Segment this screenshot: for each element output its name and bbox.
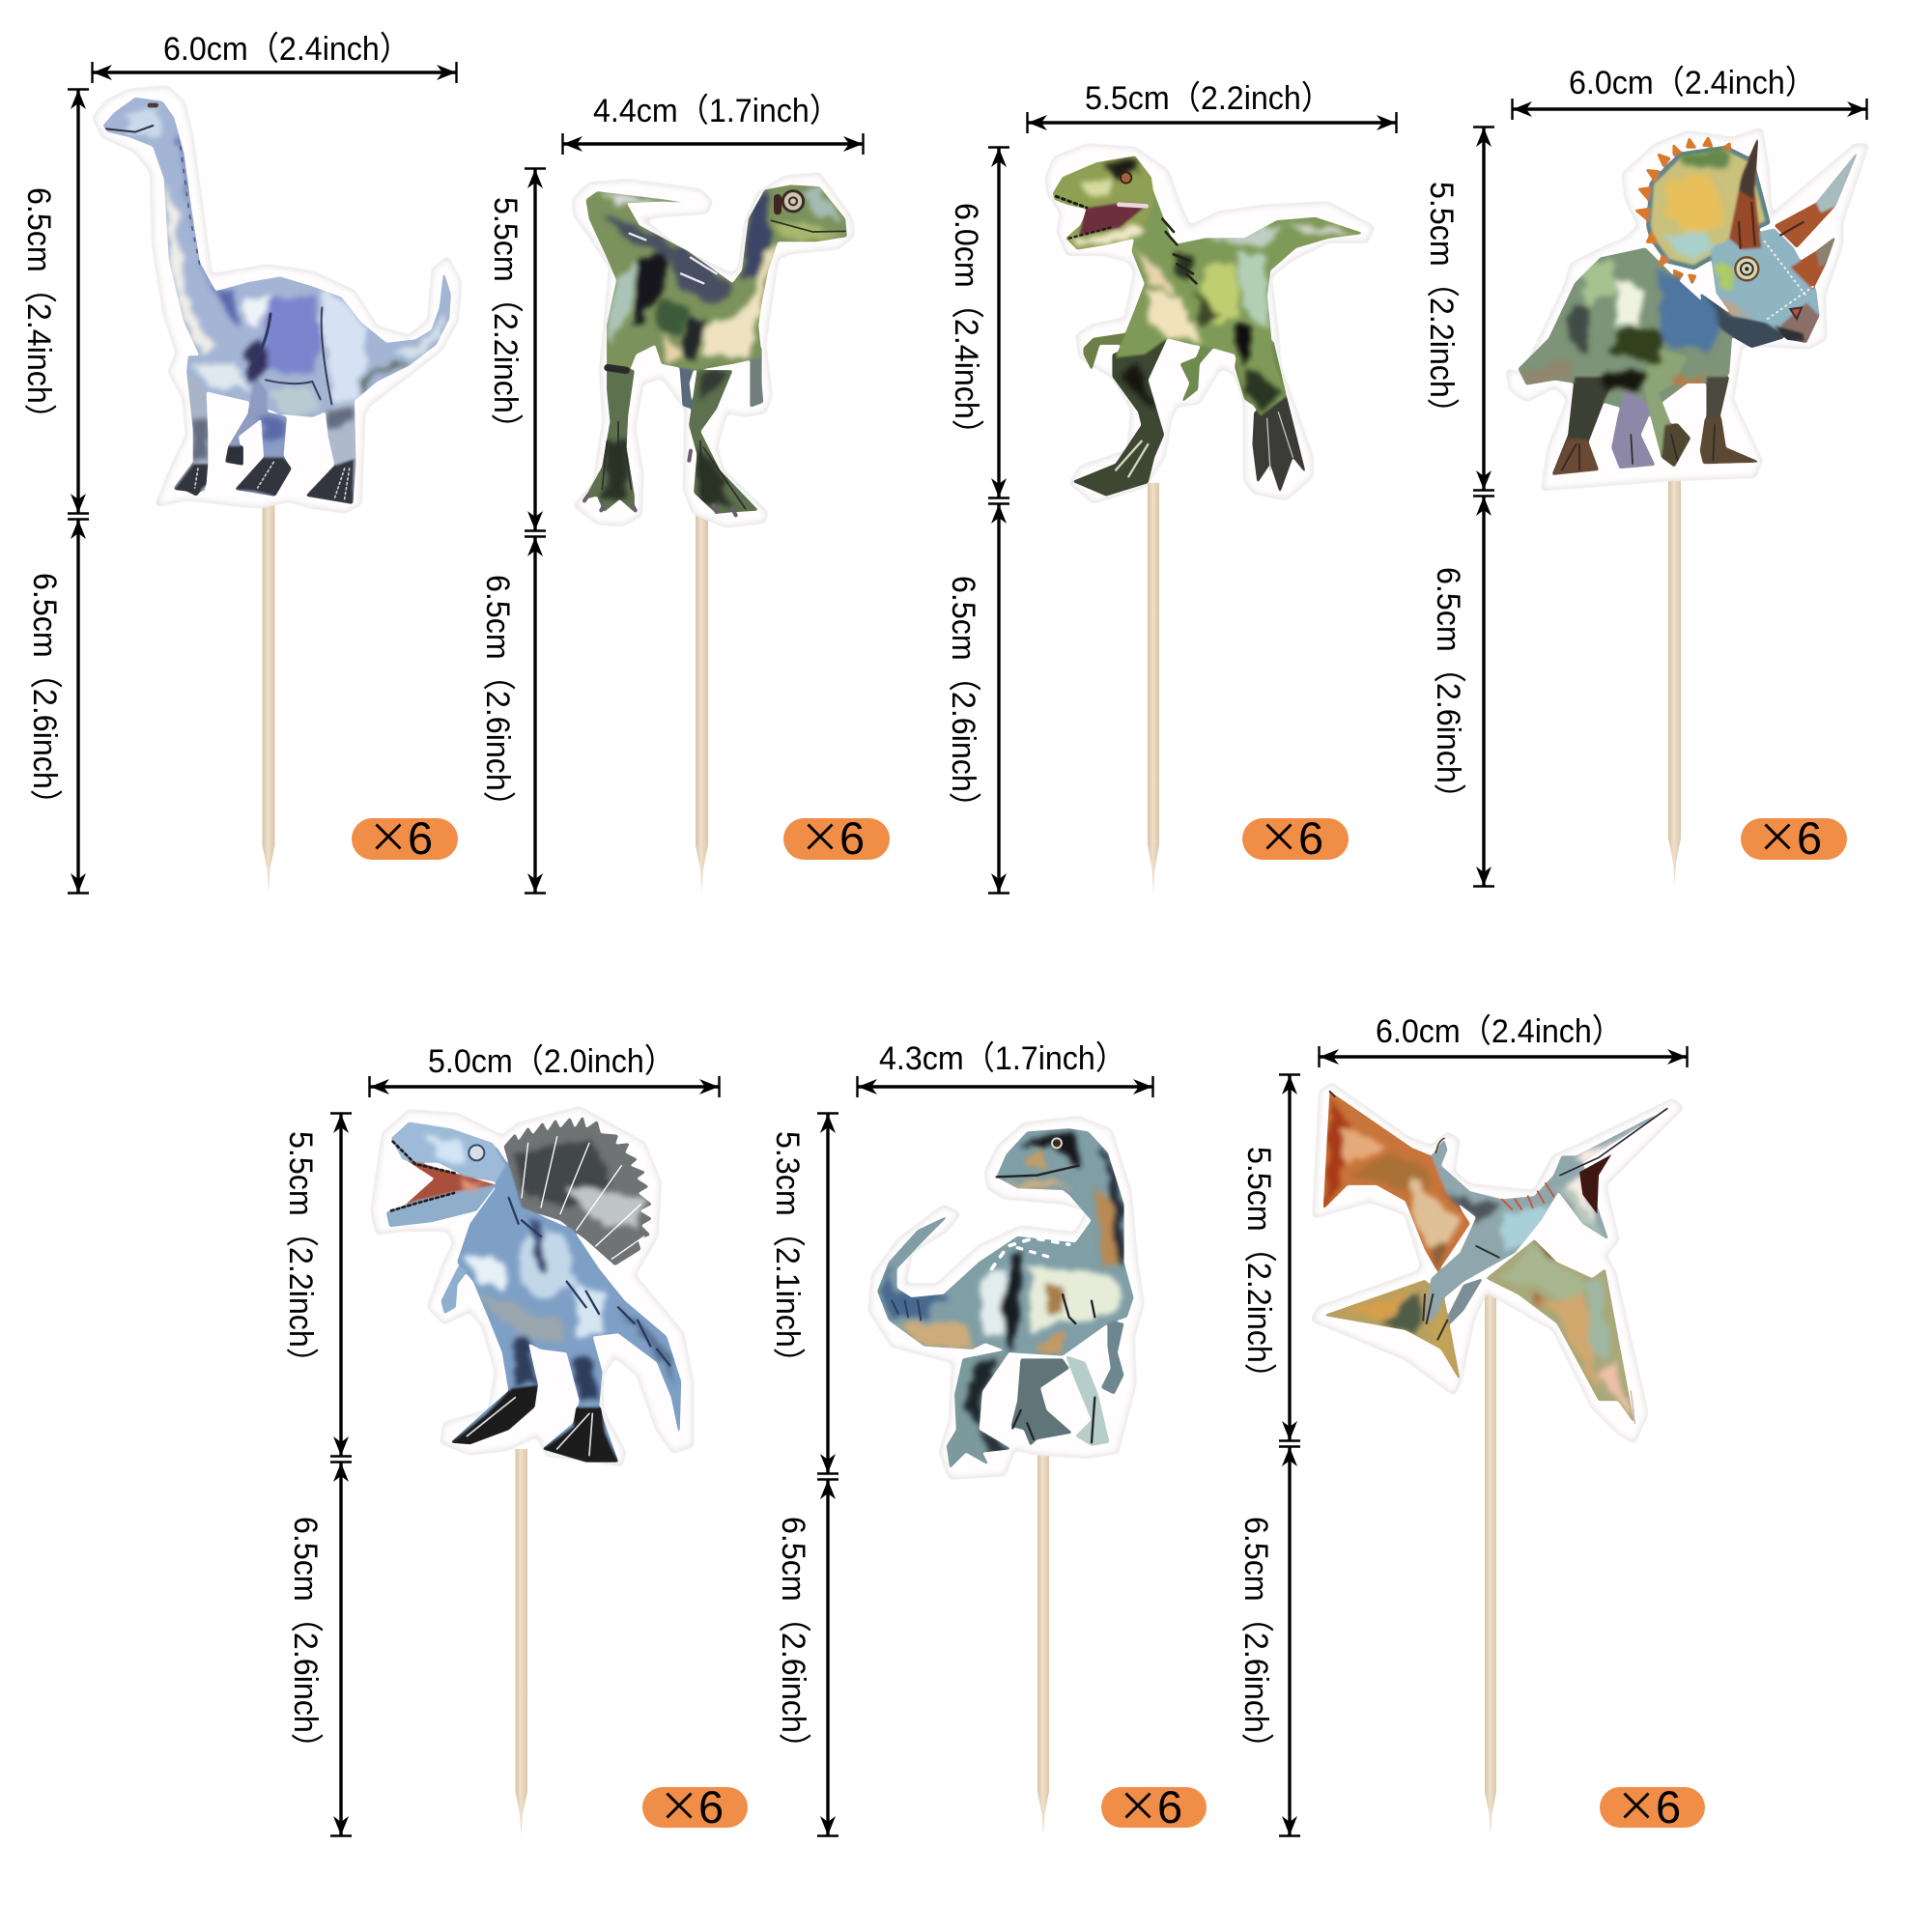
- width dimension arrow: [858, 1085, 1152, 1089]
- upper height arrow: [339, 1114, 343, 1456]
- lower height arrow: [1288, 1447, 1292, 1835]
- ink detail lines: [892, 1138, 1094, 1442]
- watercolor shading: [601, 186, 847, 505]
- triceratops figure: [1519, 136, 1858, 475]
- quantity badge: ×: [659, 1775, 699, 1833]
- upper height arrow: [533, 169, 537, 530]
- pterosaur illustration: [1312, 1084, 1683, 1442]
- ink detail lines: [1330, 1092, 1667, 1423]
- lower height arrow: [997, 504, 1001, 893]
- quantity badge: 6: [839, 812, 865, 864]
- upper height arrow: [1482, 128, 1486, 490]
- width label: 5.5cm（2.2inch）: [1085, 80, 1332, 117]
- quantity badge: [1242, 806, 1349, 865]
- upper height arrow: [826, 1114, 830, 1473]
- width label: 4.3cm（1.7inch）: [879, 1040, 1126, 1077]
- quantity badge: ×: [1259, 806, 1299, 865]
- width label: 6.0cm（2.4inch）: [1569, 65, 1816, 101]
- upper height label: 6.5cm（2.4inch）: [20, 187, 57, 435]
- sauropod illustration: [94, 87, 461, 512]
- upper height label: 5.5cm（2.2inch）: [282, 1131, 319, 1378]
- width label: 6.0cm（2.4inch）: [1376, 1013, 1623, 1050]
- quantity badge: ×: [1757, 806, 1798, 865]
- raptor illustration: [573, 174, 853, 526]
- lower height label: 6.5cm（2.6inch）: [479, 575, 516, 822]
- raptor figure: [877, 1128, 1133, 1468]
- width label: 5.0cm（2.0inch）: [428, 1043, 675, 1080]
- width label: 6.0cm（2.4inch）: [163, 31, 411, 68]
- ink detail lines: [106, 105, 350, 499]
- lower height arrow: [339, 1463, 343, 1835]
- lower height arrow: [533, 537, 537, 893]
- toothpick: [1485, 1256, 1496, 1835]
- upper height label: 5.5cm（2.2inch）: [1423, 182, 1460, 429]
- quantity badge: [352, 806, 458, 865]
- ink detail lines: [1056, 172, 1293, 476]
- quantity badge: ×: [1616, 1775, 1657, 1833]
- quantity badge: [1741, 806, 1847, 865]
- raptor figure: [584, 185, 847, 514]
- upper height label: 5.5cm（2.2inch）: [487, 197, 524, 444]
- spinosaurus figure: [386, 1116, 681, 1462]
- lower height label: 6.5cm（2.6inch）: [1430, 567, 1466, 814]
- raptor illustration: [869, 1118, 1143, 1478]
- lower height label: 6.5cm（2.6inch）: [1237, 1517, 1274, 1764]
- ink detail lines: [391, 1137, 669, 1456]
- upper height arrow: [1288, 1075, 1292, 1440]
- quantity badge: ×: [1118, 1775, 1158, 1833]
- ink detail lines: [1562, 203, 1813, 470]
- lower height arrow: [1482, 497, 1486, 886]
- upper height label: 5.5cm（2.2inch）: [1240, 1147, 1277, 1394]
- watercolor shading: [1070, 159, 1360, 409]
- quantity badge: 6: [1298, 812, 1323, 864]
- upper height label: 6.0cm（2.4inch）: [948, 203, 984, 450]
- die-cut card: [1507, 128, 1867, 490]
- upper height arrow: [76, 90, 80, 513]
- width dimension arrow: [93, 71, 456, 74]
- quantity badge: 6: [408, 812, 433, 864]
- watercolor shading: [879, 1133, 1123, 1456]
- lower height label: 6.5cm（2.6inch）: [775, 1517, 811, 1764]
- panel: pterosaur topper: [1237, 1013, 1705, 1835]
- pterosaur figure: [1323, 1092, 1666, 1423]
- toothpick: [1668, 473, 1681, 886]
- quantity badge: 6: [1797, 812, 1822, 864]
- watercolor shading: [1325, 1098, 1647, 1423]
- upper height label: 5.3cm（2.1inch）: [769, 1131, 806, 1378]
- t-rex illustration: [1046, 145, 1374, 502]
- width dimension arrow: [1320, 1055, 1687, 1059]
- sauropod figure: [103, 98, 451, 504]
- toothpick: [1148, 483, 1159, 893]
- quantity badge: [1101, 1775, 1207, 1833]
- quantity badge: ×: [368, 806, 409, 865]
- panel: green raptor topper: [479, 93, 890, 893]
- watercolor shading: [126, 108, 444, 462]
- lower height label: 6.5cm（2.6inch）: [287, 1517, 324, 1764]
- die-cut card: [869, 1118, 1143, 1478]
- die-cut card: [372, 1108, 693, 1465]
- quantity badge: 6: [1656, 1781, 1681, 1833]
- lower height label: 6.5cm（2.6inch）: [945, 576, 981, 823]
- triceratops illustration: [1507, 128, 1867, 490]
- die-cut card: [1312, 1084, 1683, 1442]
- die-cut card: [94, 87, 461, 512]
- toothpick: [263, 483, 274, 893]
- quantity badge: 6: [698, 1781, 724, 1833]
- ink detail lines: [584, 191, 845, 515]
- quantity badge: 6: [1157, 1781, 1182, 1833]
- width dimension arrow: [370, 1085, 719, 1089]
- die-cut card: [573, 174, 853, 526]
- spinosaurus illustration: [372, 1108, 693, 1465]
- panel: triceratops topper: [1423, 65, 1867, 886]
- quantity badge: [1600, 1775, 1705, 1833]
- width label: 4.4cm（1.7inch）: [593, 93, 840, 129]
- panel: spinosaurus topper: [282, 1043, 748, 1835]
- width dimension arrow: [563, 142, 863, 146]
- die-cut card: [1046, 145, 1374, 502]
- quantity badge: ×: [800, 806, 840, 865]
- quantity badge: [642, 1775, 748, 1833]
- width dimension arrow: [1513, 107, 1866, 111]
- lower height arrow: [826, 1480, 830, 1835]
- upper height arrow: [997, 148, 1001, 497]
- lower height arrow: [76, 520, 80, 893]
- panel: long-neck sauropod topper: [20, 31, 461, 893]
- toothpick: [516, 1449, 527, 1835]
- lower height label: 6.5cm（2.6inch）: [26, 573, 63, 820]
- panel: blue-green raptor topper: [769, 1040, 1207, 1835]
- watercolor shading: [1523, 152, 1755, 393]
- toothpick: [1037, 1449, 1049, 1835]
- t-rex figure: [1053, 156, 1364, 496]
- panel: green t-rex topper: [945, 80, 1396, 893]
- quantity badge: [783, 806, 890, 865]
- toothpick: [696, 483, 708, 893]
- width dimension arrow: [1028, 121, 1396, 125]
- watercolor shading: [428, 1137, 676, 1401]
